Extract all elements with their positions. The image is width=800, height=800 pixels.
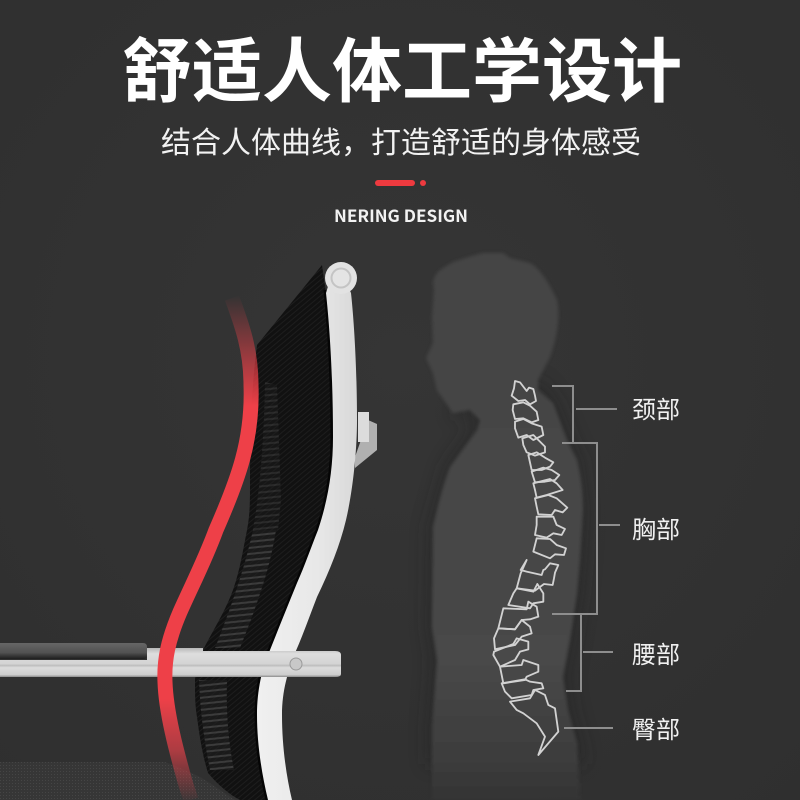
screw [290,658,302,670]
mesh backrest [195,265,333,800]
body silhouette [426,253,583,800]
spine illustration [493,381,567,755]
mesh lower light band [199,530,276,770]
hip leader line [564,727,613,729]
torso shadow [432,385,583,760]
mesh dark edge [256,290,332,800]
white frame [257,280,357,800]
mesh upper light band [253,382,281,530]
pivot knob [325,262,357,294]
red spine curve [165,298,251,800]
label: hip: 臀部 [632,710,680,745]
label: waist: 腰部 [632,635,680,670]
chair side view [0,262,377,800]
seat cushion [0,762,235,800]
neck bracket [552,386,617,442]
waist bracket [566,614,613,691]
title: 舒适人体工学设计 [122,16,682,117]
armrest pad [0,643,147,659]
upper vertebrae [512,381,567,558]
label: chest: 胸部 [632,510,680,545]
english caption: NERING DESIGN [334,202,468,227]
armrest bar [0,648,341,677]
chest bracket [552,443,620,614]
label: neck: 颈部 [632,390,680,425]
tilt bracket [355,412,377,468]
red accent mark [375,180,426,186]
subtitle: 结合人体曲线，打造舒适的身体感受 [161,118,641,162]
lower vertebrae and sacrum [493,560,558,755]
